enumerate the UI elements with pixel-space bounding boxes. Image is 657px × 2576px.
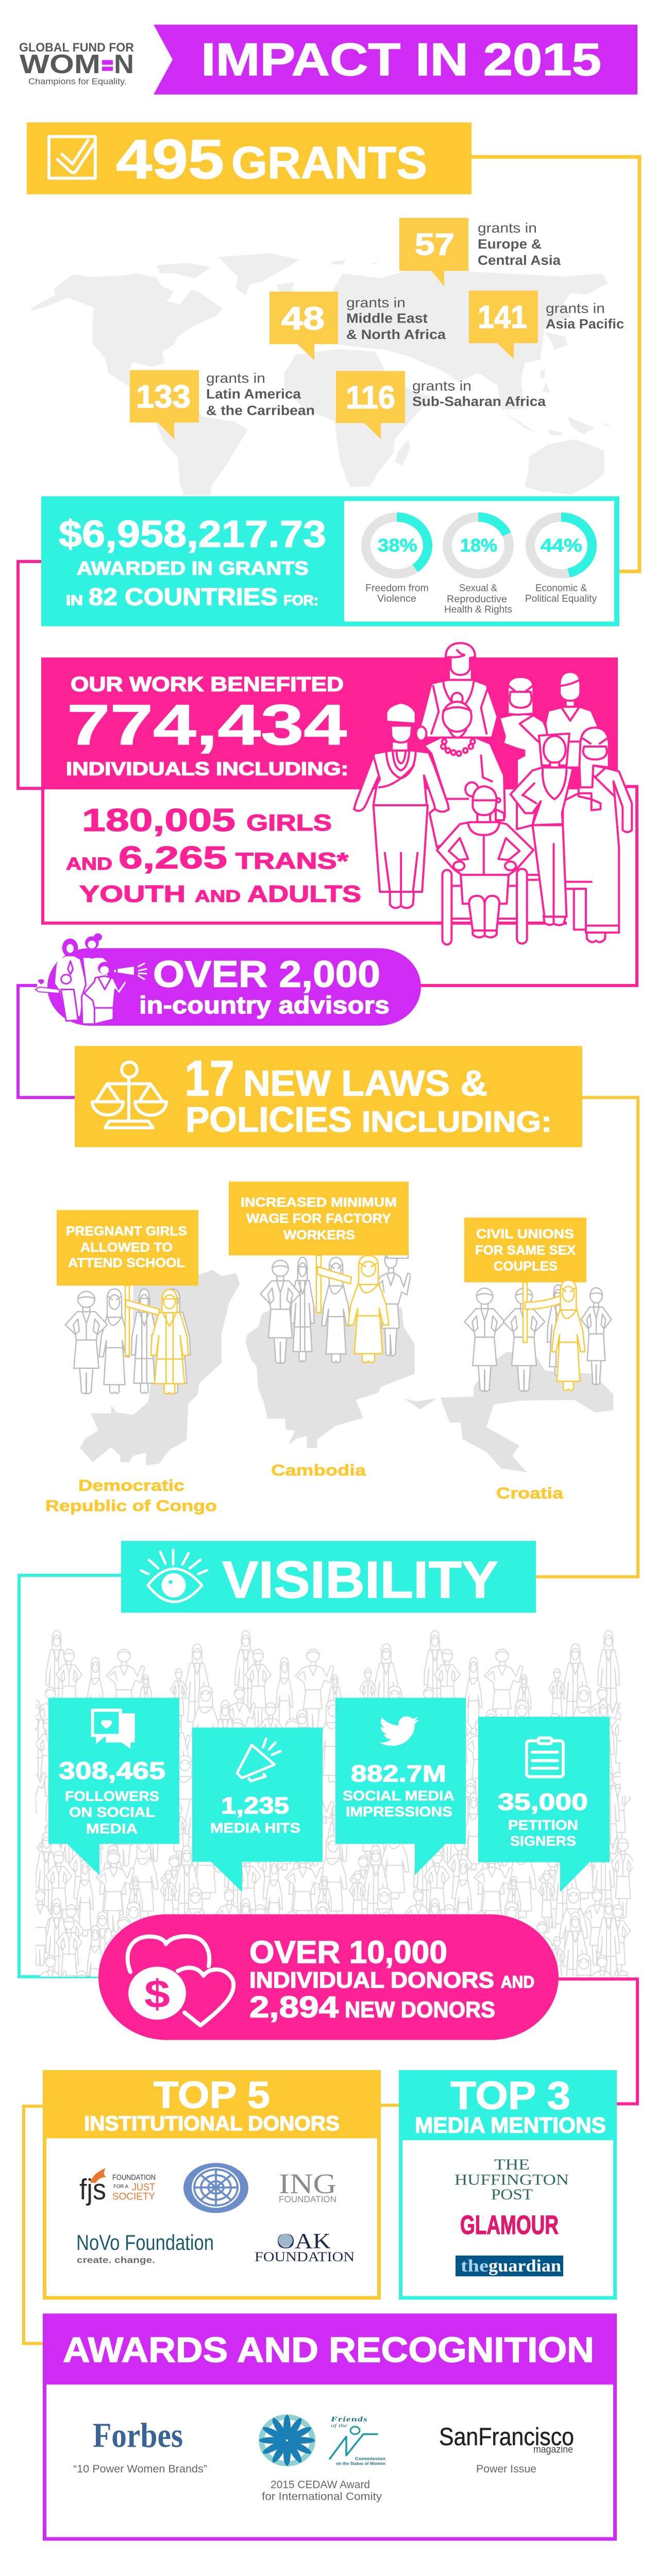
callout: 48 grants Middle East and North Africa: grants in: [346, 295, 406, 310]
award: San Francisco magazine: [439, 2422, 574, 2475]
card: media hits: MEDIA HITS: [210, 1820, 300, 1836]
panel: grants total and focus areas: IN: [66, 592, 83, 608]
card: followers on social media: [48, 1698, 179, 1875]
logo: The Guardian: guardian: [488, 2256, 561, 2276]
logo: Foundation for a Just Society: FOR A: [113, 2183, 129, 2190]
figure: seated woman in wheelchair: [437, 783, 538, 944]
callout: 48 grants Middle East and North Africa: Middle East: [346, 311, 428, 326]
heading: 495 grants: 495: [116, 128, 224, 190]
connector: pink donors to top 3: [559, 1979, 637, 2104]
award: Forbes: “10 Power Women Brands”: [73, 2463, 207, 2475]
callout: 116 grants Sub-Saharan Africa: grants in: [412, 378, 471, 394]
callout: 48 grants Middle East and North Africa: 48: [281, 300, 325, 337]
logo: Global Fund for Women: WOM: [20, 48, 100, 79]
panel: over 2,000 in-country advisors: OVER 2,000: [153, 954, 380, 995]
heading: 17 new laws and policies: POLICIES: [186, 1100, 352, 1140]
logo: Oak Foundation: OAK: [277, 2229, 331, 2253]
award: Forbes: Forbes: [93, 2416, 183, 2455]
logo: Global Fund for Women: Champions for Equality.: [28, 76, 127, 86]
figure: back right short hair: [545, 672, 598, 768]
icon: eye: [141, 1550, 207, 1602]
panel: our work benefited: ADULTS: [247, 881, 361, 907]
card: media hits: 1,235: [221, 1793, 289, 1819]
logo: The Guardian: the: [461, 2256, 488, 2276]
panel: our work benefited: 180,005: [82, 802, 235, 838]
icon: chat bubbles with heart: [91, 1708, 135, 1749]
logo: Global Fund for Women: [19, 41, 134, 86]
panel: donors pill: INDIVIDUAL DONORS: [249, 1968, 494, 1992]
donut: 38% freedom from violence: [365, 517, 429, 604]
heading: visibility: VISIBILITY: [222, 1551, 498, 1609]
heading: 17 new laws and policies: [75, 1046, 582, 1147]
heading: 17 new laws and policies: 17: [184, 1050, 234, 1107]
panel: top 5 institutional donors: INSTITUTIONAL DONORS: [84, 2112, 340, 2134]
logo: The Huffington Post: [454, 2156, 569, 2202]
panel: donors pill: 2,894: [249, 1990, 339, 2024]
map: Croatia: [403, 1352, 613, 1472]
sign: civil unions for same sex couples: CIVIL UNIONS: [476, 1228, 574, 1241]
logo: Global Fund for Women: N: [114, 48, 134, 79]
panel: donors pill: $: [144, 1972, 170, 2016]
sign: increased minimum wage for factory workers: WAGE FOR FACTORY: [246, 1212, 391, 1226]
panel: our work benefited: 6,265: [119, 840, 227, 875]
sign: increased minimum wage for factory workers: INCREASED MINIMUM: [241, 1196, 397, 1210]
award: CEDAW: [259, 2414, 385, 2502]
callout: 116 grants Sub-Saharan Africa: Sub-Saharan Africa: [412, 394, 546, 409]
award: Forbes: [73, 2416, 207, 2475]
donut: 38% freedom from violence: Freedom from: [365, 583, 429, 594]
heading: 17 new laws and policies: INCLUDING:: [362, 1105, 552, 1138]
icon: scales of justice: [92, 1062, 166, 1128]
logo: NoVo Foundation: NoVo Foundation: [76, 2231, 214, 2255]
panel: grants total and focus areas: FOR:: [283, 592, 318, 608]
panel: grants total and focus areas: 82 COUNTRIES: [89, 583, 278, 611]
figure: right woman long hair: [563, 727, 632, 942]
sign: pregnant girls allowed to attend school: ATTEND SCHOOL: [68, 1257, 185, 1270]
country labels: Republic of Congo: [45, 1497, 217, 1515]
callout: 141 grants Asia Pacific: 141: [478, 299, 527, 335]
panel: top 3 media mentions: MEDIA MENTIONS: [415, 2113, 606, 2138]
award: CEDAW: Commission: [355, 2456, 385, 2461]
award: San Francisco magazine: Power Issue: [476, 2463, 536, 2475]
card: followers on social media: MEDIA: [86, 1821, 138, 1836]
award: CEDAW: on the Status of Women: [336, 2461, 385, 2466]
card: followers on social media: FOLLOWERS: [65, 1789, 159, 1804]
heading: 495 grants: [27, 123, 471, 194]
logo: Global Fund for Women: GLOBAL FUND FOR: [19, 41, 134, 55]
logo: Oak Foundation: [255, 2229, 355, 2265]
world map: [30, 253, 610, 496]
logo: NoVo Foundation: create. change.: [77, 2255, 155, 2265]
figure: back right long hair: [499, 677, 548, 829]
panel: grants total and focus areas: $6,958,217.73: [59, 513, 326, 555]
sign: pregnant girls allowed to attend school: ALLOWED TO: [80, 1241, 173, 1255]
callout: 57 grants Europe and Central Asia: grants in: [478, 220, 537, 235]
donut: 38% freedom from violence: 38%: [378, 535, 417, 555]
callout: 57 grants Europe and Central Asia: 57: [415, 228, 454, 262]
donut: 18% sexual and reproductive health: Sexual &: [459, 583, 498, 594]
award: CEDAW: for International Comity: [262, 2490, 382, 2502]
connector: teal visibility to donors: [19, 1575, 121, 1977]
figure: left woman with head wrap: [354, 703, 449, 908]
panel: awards and recognition: AWARDS AND RECOGNITION: [63, 2330, 594, 2370]
sign: increased minimum wage for factory workers: [229, 1182, 409, 1256]
illustration: yellow protester group 2: [317, 1256, 389, 1363]
illustration: group of women in pink outline: [354, 643, 632, 944]
logo: The Huffington Post: THE: [494, 2156, 530, 2173]
card: petition signers: SIGNERS: [510, 1834, 576, 1849]
illustration: yellow protester group 3: [552, 1280, 585, 1391]
illustration: protest group 1: [65, 1285, 190, 1394]
logo: Foundation for a Just Society: SOCIETY: [112, 2191, 155, 2202]
map: Democratic Republic of Congo: [80, 1270, 240, 1465]
callout: 133 grants Latin America and the Caribbean: grants in: [206, 370, 265, 386]
heading: 17 new laws and policies: NEW LAWS &: [243, 1063, 487, 1104]
callout: 57 grants Europe and Central Asia: [399, 218, 561, 286]
donut: 44% economic and political equality: Economic &: [535, 583, 587, 594]
logo: The Guardian: [456, 2256, 563, 2276]
sign: civil unions for same sex couples: COUPLES: [494, 1260, 558, 1274]
logo: Foundation for a Just Society: fjs: [79, 2173, 106, 2206]
logo: The Huffington Post: POST: [491, 2186, 533, 2202]
icon: advisors group with megaphone: [35, 934, 146, 1024]
card: media hits: [192, 1727, 323, 1892]
callout: 133 grants Latin America and the Caribbean: & the Carribean: [206, 403, 315, 418]
donut: 18% sexual and reproductive health: Reproductive: [447, 594, 507, 605]
callout: 141 grants Asia Pacific: [469, 291, 624, 359]
logo: Foundation for a Just Society: [79, 2168, 156, 2206]
panel: our work benefited: YOUTH: [79, 881, 186, 907]
panel: donors pill: NEW DONORS: [345, 1997, 495, 2022]
panel: our work benefited: AND: [66, 854, 112, 874]
callout: 133 grants Latin America and the Caribbean: 133: [136, 378, 191, 414]
country labels: [45, 1461, 563, 1515]
panel: our work benefited: AND: [195, 888, 241, 906]
callout: 48 grants Middle East and North Africa: & North Africa: [346, 327, 446, 342]
logo: Oak Foundation: FOUNDATION: [255, 2249, 355, 2265]
logo: Foundation for a Just Society: JUST: [132, 2182, 155, 2193]
card: social media impressions: 882.7M: [351, 1760, 446, 1786]
card: followers on social media: 308,465: [59, 1757, 165, 1785]
award: San Francisco magazine: SanFrancisco: [439, 2422, 574, 2450]
callout: 57 grants Europe and Central Asia: Central Asia: [478, 253, 561, 267]
card: social media impressions: [335, 1698, 466, 1875]
callout: 133 grants Latin America and the Caribbean: Latin America: [206, 386, 301, 401]
figure: woman with crown of hair: [511, 734, 573, 925]
donut: 44% economic and political equality: 44%: [541, 535, 582, 555]
panel: top 5 institutional donors: TOP 5: [154, 2075, 270, 2116]
callout: 141 grants Asia Pacific: Asia Pacific: [546, 317, 624, 331]
country labels: Cambodia: [271, 1461, 366, 1479]
callout: 57 grants Europe and Central Asia: Europe &: [478, 237, 542, 251]
panel: our work benefited: GIRLS: [246, 810, 332, 835]
title banner: [154, 25, 637, 94]
donut: 18% sexual and reproductive health: [444, 517, 512, 615]
logo: Foundation for a Just Society: FOUNDATION: [112, 2174, 156, 2182]
connector: yellow grants to teal: [471, 157, 639, 571]
sign: pregnant girls allowed to attend school: [57, 1210, 198, 1285]
logo: United Nations emblem: [183, 2163, 248, 2213]
card: petition signers: 35,000: [498, 1789, 588, 1815]
card: social media impressions: IMPRESSIONS: [346, 1804, 452, 1819]
figure: back centre woman: [417, 643, 498, 738]
panel: our work benefited: [41, 657, 637, 986]
award: San Francisco magazine: magazine: [533, 2444, 573, 2455]
logo: The Huffington Post: HUFFINGTON: [454, 2172, 569, 2188]
country labels: Democratic: [78, 1477, 184, 1494]
heading: 495 grants: GRANTS: [231, 138, 427, 188]
icon: hearts and dollar coin: [128, 1936, 233, 2025]
card: followers on social media: ON SOCIAL: [69, 1805, 155, 1820]
connector: yellow laws to visibility: [536, 1097, 638, 1577]
card: petition signers: PETITION: [508, 1817, 578, 1833]
donut: 44% economic and political equality: Political Equality: [525, 594, 597, 604]
icon: twitter bird: [379, 1716, 419, 1746]
logo: ING Foundation: FOUNDATION: [279, 2194, 336, 2204]
connector: purple advisors to laws: [18, 986, 75, 1097]
icon: megaphone: [237, 1739, 280, 1781]
sign: increased minimum wage for factory workers: WORKERS: [283, 1228, 355, 1242]
illustration: crowd background: [16, 1631, 635, 2060]
country labels: Croatia: [496, 1484, 563, 1502]
sign: civil unions for same sex couples: FOR SAME SEX: [475, 1244, 576, 1258]
donut: 18% sexual and reproductive health: Health & Rights: [444, 604, 512, 615]
callout: 48 grants Middle East and North Africa: [269, 292, 446, 360]
panel: grants total and focus areas: [41, 496, 619, 626]
logo: NoVo Foundation: [76, 2231, 214, 2265]
connector: yellow top 5 links: [24, 2105, 399, 2344]
card: social media impressions: SOCIAL MEDIA: [343, 1788, 454, 1803]
connector: pink teal box to pink box: [18, 562, 42, 788]
panel: grants total and focus areas: AWARDED IN GRANTS: [77, 558, 309, 579]
callout: 116 grants Sub-Saharan Africa: 116: [346, 379, 395, 415]
logo: Glamour: GLAMOUR: [460, 2210, 559, 2240]
card: petition signers: [478, 1717, 610, 1892]
donut: 44% economic and political equality: [525, 517, 597, 604]
award: CEDAW: of the: [331, 2423, 348, 2429]
heading: visibility: [121, 1541, 536, 1613]
award: CEDAW: 2015 CEDAW Award: [271, 2478, 370, 2490]
panel: over 2,000 in-country advisors: [35, 934, 421, 1026]
panel: over 2,000 in-country advisors: in-country advisors: [139, 991, 390, 1019]
illustration: protest group 2: [260, 1251, 411, 1363]
sign: pregnant girls allowed to attend school: PREGNANT GIRLS: [66, 1225, 187, 1239]
callout: 116 grants Sub-Saharan Africa: [336, 371, 546, 439]
panel: our work benefited: 774,434: [67, 693, 347, 757]
icon: clipboard: [527, 1738, 563, 1777]
illustration: protest group 3: [464, 1282, 611, 1391]
panel: top 5 institutional donors: [43, 2070, 381, 2298]
award: CEDAW: Friends: [330, 2416, 368, 2424]
logo: ING Foundation: ING: [279, 2168, 336, 2199]
figure: centre woman with necklace: [424, 693, 505, 847]
panel: top 3 media mentions: TOP 3: [450, 2074, 570, 2117]
icon: checkbox: [49, 137, 95, 178]
donut: 18% sexual and reproductive health: 18%: [460, 535, 497, 555]
map: Cambodia: [245, 1306, 415, 1448]
panel: donors pill: AND: [501, 1973, 534, 1991]
panel: our work benefited: OUR WORK BENEFITED: [71, 673, 344, 696]
sign: civil unions for same sex couples: [464, 1217, 586, 1282]
panel: our work benefited: INDIVIDUALS INCLUDING:: [66, 758, 348, 779]
panel: awards and recognition: [43, 2314, 617, 2539]
panel: donors pill: [98, 1914, 559, 2040]
panel: donors pill: OVER 10,000: [249, 1935, 447, 1970]
callout: 141 grants Asia Pacific: grants in: [546, 300, 605, 316]
panel: top 3 media mentions: [399, 2070, 617, 2298]
callout: 133 grants Latin America and the Caribbean: [130, 370, 315, 439]
donut: 38% freedom from violence: Violence: [377, 594, 416, 604]
panel: our work benefited: TRANS*: [235, 848, 348, 874]
title banner: IMPACT IN 2015: [201, 34, 601, 85]
